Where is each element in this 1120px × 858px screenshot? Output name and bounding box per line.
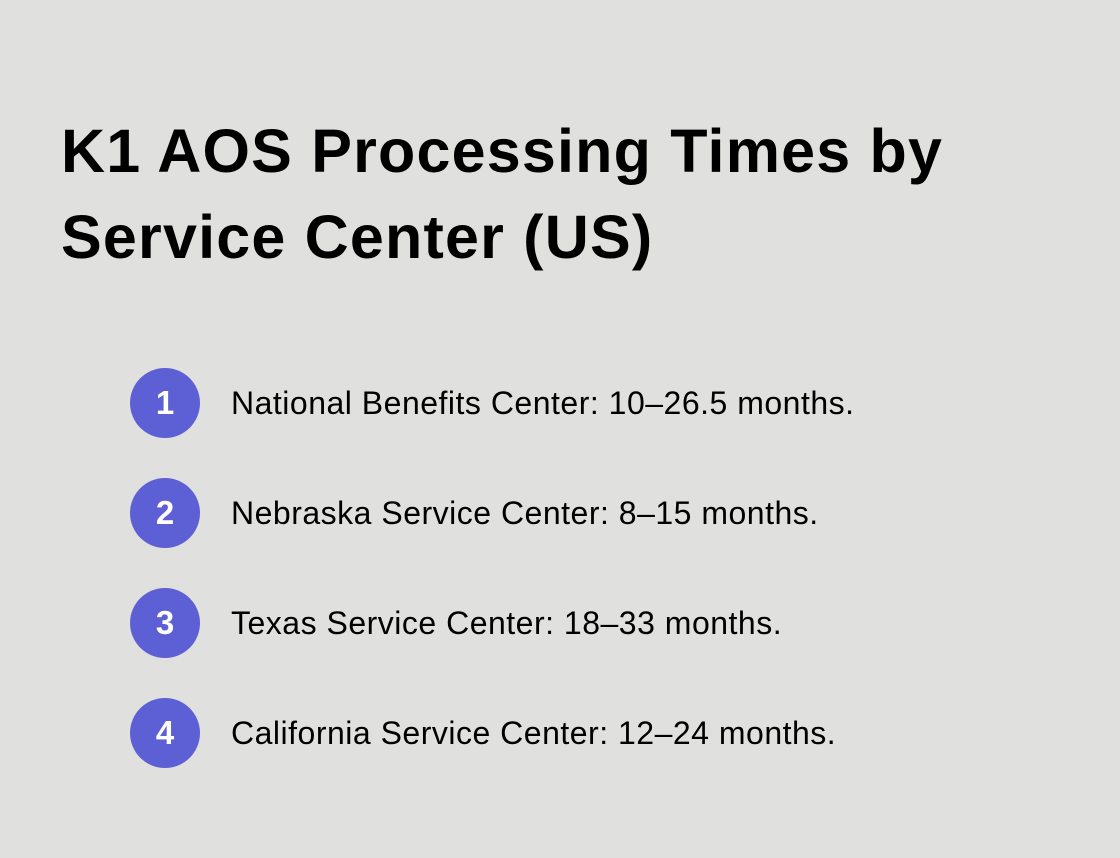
text 3: Texas Service Center: 18–33 months. — [231, 605, 782, 641]
number badge 3: 3 — [156, 604, 174, 641]
number badge 2: 2 — [156, 494, 174, 531]
number badge 1: 1 — [156, 384, 174, 421]
text 2: Nebraska Service Center: 8–15 months. — [231, 495, 819, 531]
item 1 — [130, 368, 855, 438]
number badge 4 — [130, 698, 200, 768]
number badge 1 — [130, 368, 200, 438]
title — [61, 117, 943, 271]
number badge 3 — [130, 588, 200, 658]
item 4 — [130, 698, 836, 768]
text 4: California Service Center: 12–24 months. — [231, 715, 836, 751]
number badge 2 — [130, 478, 200, 548]
number badge 4: 4 — [156, 714, 174, 751]
title: K1 AOS Processing Times by — [61, 117, 943, 185]
text 1: National Benefits Center: 10–26.5 months. — [231, 385, 855, 421]
title: Service Center (US) — [61, 203, 653, 271]
item 2 — [130, 478, 819, 548]
item 3 — [130, 588, 782, 658]
